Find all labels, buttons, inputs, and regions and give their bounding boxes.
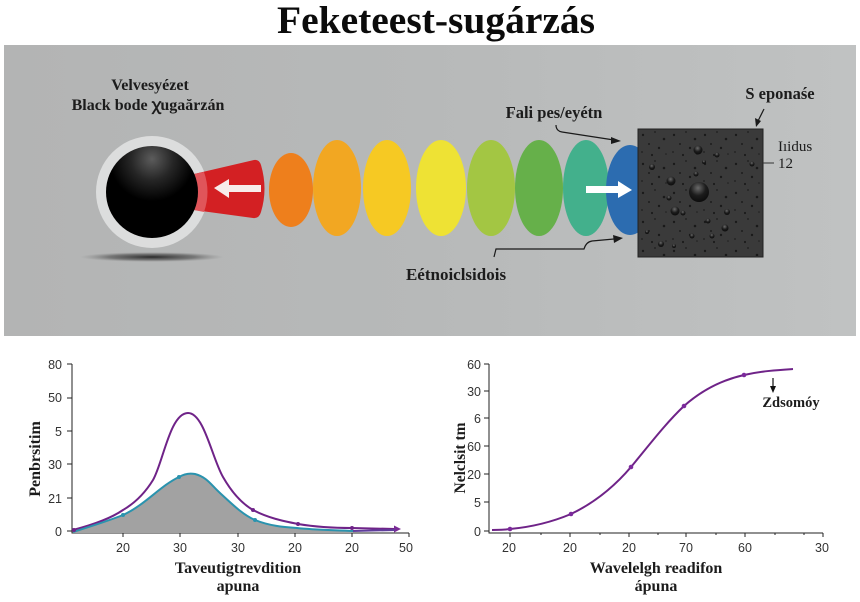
leader line [763, 162, 774, 164]
text: top centre label: Fali pes/eyétn [506, 103, 602, 122]
y-axis tick labels: 80 [48, 358, 62, 372]
arrow: label to cavity upper [556, 125, 621, 144]
y-axis tick labels [467, 358, 481, 539]
arrow: label to cavity lower [494, 235, 623, 257]
x-axis tick labels: 50 [399, 541, 413, 555]
purple curve [73, 413, 395, 530]
text: side label: Iıidus [778, 139, 812, 155]
purple s-curve [492, 369, 793, 530]
arrow: white left arrow [214, 179, 261, 198]
text: top right label: S eponaśe [745, 84, 815, 103]
y-axis tick labels: 5 [55, 425, 62, 439]
curve markers [508, 373, 746, 531]
x-axis tick labels: 30 [231, 541, 245, 555]
y-axis tick labels: 60 [467, 440, 481, 454]
text: black body label [72, 77, 225, 115]
y-axis tick labels: 6 [474, 412, 481, 426]
arrow: top right label to square [755, 109, 764, 127]
text: side label [778, 139, 812, 172]
x-axis tick labels: 60 [738, 541, 752, 555]
y-axis tick labels: 60 [467, 358, 481, 372]
y-axis tick labels: 5 [474, 496, 481, 510]
y-axis title: Nelclsit tm [452, 422, 469, 494]
y-axis tick labels: 21 [48, 492, 62, 506]
y-axis tick labels: 0 [55, 525, 62, 539]
text: annotation: Zdsomóy [762, 395, 820, 411]
y-axis tick labels: 50 [48, 391, 62, 405]
text: side label: 12 [778, 156, 793, 172]
x-axis tick labels: 20 [288, 541, 302, 555]
x-axis tick labels [116, 541, 413, 555]
text: black body label: Velvesyézet [111, 77, 189, 94]
text: lower label: Eétnoiclsidois [406, 265, 506, 284]
axes [484, 364, 823, 537]
x-axis title [175, 560, 301, 595]
y-axis tick labels: 30 [48, 458, 62, 472]
x-axis tick labels: 20 [345, 541, 359, 555]
x-axis title [590, 560, 722, 595]
arrow: annotation [770, 378, 776, 393]
x-axis tick labels: 30 [815, 541, 829, 555]
icon: floor shadow [80, 252, 224, 262]
white halo [73, 413, 395, 530]
x-axis title: apuna [217, 578, 259, 595]
icon: sphere ring [96, 136, 208, 248]
y-axis title: Penbrsitim [27, 421, 44, 497]
teal curve [73, 474, 353, 532]
arrow tip and markers [72, 475, 401, 532]
x-axis tick labels: 20 [502, 541, 516, 555]
x-axis tick labels: 70 [679, 541, 693, 555]
y-axis tick labels [48, 358, 62, 539]
y-axis tick labels: 30 [467, 385, 481, 399]
panel: black-body diagram [4, 45, 856, 336]
spectrum ellipses [269, 140, 654, 236]
icon: black sphere [106, 146, 198, 238]
x-axis title: Taveutigtrevdition [175, 560, 301, 577]
chart: left spectrum chart [27, 358, 413, 595]
x-axis tick labels: 20 [622, 541, 636, 555]
icon: red emission cone [194, 160, 264, 218]
icon: dark textured cavity square [638, 129, 763, 257]
y-axis tick labels: 20 [467, 468, 481, 482]
chart: right cumulative chart [452, 358, 829, 595]
x-axis title: ápuna [635, 578, 677, 595]
y-axis tick labels: 0 [474, 525, 481, 539]
text: black body label: Black bode ꭓugaărzán [72, 97, 225, 115]
x-axis tick labels [502, 541, 829, 555]
arrow: white right arrow [586, 181, 632, 198]
x-axis tick labels: 30 [173, 541, 187, 555]
x-axis title: Wavelelgh readifon [590, 560, 722, 577]
x-axis tick labels: 20 [563, 541, 577, 555]
axes [67, 364, 409, 537]
grey area [73, 474, 353, 533]
x-axis tick labels: 20 [116, 541, 130, 555]
